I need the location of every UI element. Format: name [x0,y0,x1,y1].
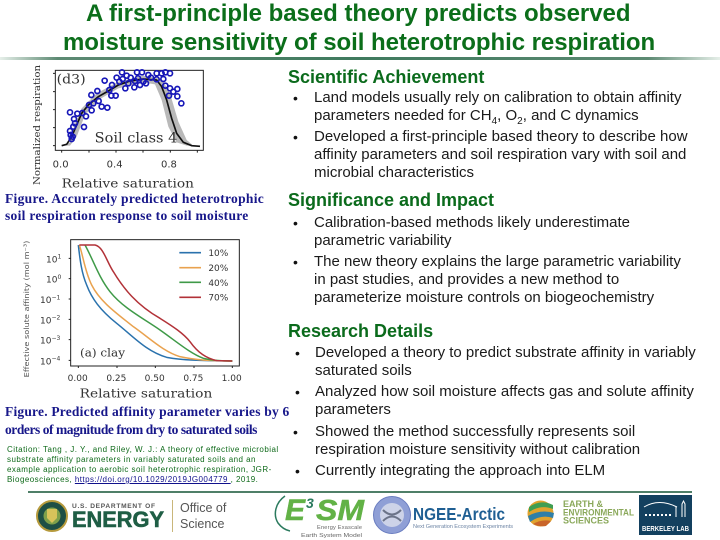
y tick labels: 1 [57,254,61,261]
panel: significance and impact: parameterize moisture controls on biogeochemistry [314,289,654,306]
panel: research details [288,321,696,479]
panel: significance and impact: in past studies, and provides a new method to [314,271,619,288]
y tick labels: 10 [40,357,51,367]
panel label clay: (a) clay [80,346,126,359]
panel: significance and impact: The new theory explains the large parametric variability [314,253,681,270]
heading: scientific achievement: Scientific Achievement [288,67,484,87]
logo: US Department of Energy, Office of Science: Science [180,517,225,531]
citation: substrate affinity parameters in variably saturated soils and an [7,455,256,464]
logo: US Department of Energy, Office of Science: U.S. DEPARTMENT OF [72,503,155,510]
curve 10% [78,245,232,361]
x tick labels: 0.00 [68,374,88,384]
panel: scientific achievement: • [293,129,298,145]
uncertainty band [62,76,193,146]
logo: E3SM: SM [316,495,365,527]
x tick labels: 1.00 [222,374,242,384]
title: A first-principle based theory predicts observed [86,0,630,27]
title [63,0,655,56]
panel: scientific achievement: • [293,90,298,106]
bullets [293,344,696,479]
model curve [62,79,200,146]
title: moisture sensitivity of soil heterotrophic respiration [63,29,655,56]
logo: US Department of Energy, Office of Science: ENERGY [72,507,164,532]
x axis title: Relative saturation [62,176,194,190]
x tick labels [53,159,177,170]
panel: research details: Analyzed how soil moisture affects gas and solute affinity [315,383,694,400]
y tick labels: −1 [51,294,60,301]
logo: E3SM: 3 [306,495,314,511]
x tick labels: 0.0 [53,159,69,170]
x tick labels: 0.8 [161,159,177,170]
panel: scientific achievement: affinity parameters and soil respiration vary with soil and [314,146,686,163]
panel: significance and impact: • [293,215,298,231]
logo: E3SM: Earth System Model [301,533,362,539]
logo: Earth and Environmental Sciences [528,499,634,526]
citation: example application to aerobic soil heterotrophic respiration, JGR- [7,465,272,474]
x tick labels: 0.25 [106,374,126,384]
logo: Berkeley Lab [639,495,692,535]
logo: E3SM [274,494,365,539]
panel: research details: Showed the method successfully represents soil [315,423,635,440]
y tick labels: 10 [40,337,51,347]
logo: NGEE-Arctic [373,496,513,534]
panel: significance and impact [288,190,681,306]
panel: scientific achievement: Land models usually rely on calibration to obtain affinity [314,89,681,106]
y tick labels: −4 [51,356,60,363]
caption: respiration figure: Figure. Accurately predicted heterotrophic [5,191,264,206]
citation: Biogeosciences, https://doi.org/10.1029/2019JG004779 , 2019. [7,475,258,484]
chart: effective solute affinity [22,239,242,401]
y tick labels: 10 [46,276,57,286]
logo: NGEE-Arctic: NGEE-Arctic [413,504,505,524]
bullets [293,89,688,181]
bullets [293,214,681,306]
y tick labels: −2 [51,315,60,322]
y tick labels [40,254,61,367]
y axis title: Effective solute affinity (mol m⁻³) [22,241,31,377]
chart: normalized respiration vs relative saturation [32,65,204,190]
heading: research details: Research Details [288,321,433,341]
caption: respiration figure: soil respiration response to soil moisture [5,208,249,223]
legend: 70% [208,294,229,304]
x tick labels [68,374,242,384]
logo: US Department of Energy, Office of Science [36,500,227,532]
logo: Earth and Environmental Sciences: EARTH & [563,499,603,509]
y tick labels: 0 [57,274,61,281]
legend [179,249,229,304]
panel: research details: Developed a theory to predict substrate affinity in variably [315,344,696,361]
citation: Citation: Tang , J. Y., and Riley, W. J.: A theory of effective microbial [7,445,279,454]
panel: scientific achievement: Developed a first-principle based theory to describe how [314,128,688,145]
panel: research details: • [295,463,300,479]
curve 70% [79,245,232,361]
panel: research details: Currently integrating the approach into ELM [315,462,605,479]
x tick labels: 0.75 [183,374,203,384]
x axis title: Relative saturation [80,387,212,401]
caption: affinity figure: Figure. Predicted affinity parameter varies by 6 [5,404,289,419]
legend: 20% [208,264,229,274]
curve 40% [85,245,232,361]
logo: E3SM: Energy Exascale [317,525,362,531]
caption: affinity figure [5,404,289,437]
axes frame [55,70,203,150]
panel label d3: (d3) [57,73,86,88]
panel: scientific achievement: microbial characteristics [314,164,474,181]
header rule [0,57,720,60]
panel: research details: saturated soils [315,362,412,379]
panel: significance and impact: parametric variability [314,232,452,249]
curve 20% [79,245,232,361]
footer rule [28,491,692,493]
panel: research details: • [295,384,300,400]
panel: research details: parameters [315,401,391,418]
y tick labels: −3 [51,335,60,342]
panel: scientific achievement [288,67,688,181]
panel: significance and impact: Calibration-based methods likely underestimate [314,214,630,231]
legend: 10% [208,249,229,259]
legend: 40% [208,279,229,289]
caption: affinity figure: orders of magnitude from dry to saturated soils [5,422,257,437]
logo: NGEE-Arctic: Next Generation Ecosystem Experiments [413,524,513,530]
observed points [68,70,184,142]
y tick labels: 10 [40,296,51,306]
panel: research details: • [295,345,300,361]
caption: respiration figure [5,191,264,223]
x tick labels: 0.50 [145,374,165,384]
panel: significance and impact: • [293,254,298,270]
citation [7,445,279,484]
logo: US Department of Energy, Office of Science: Office of [180,501,227,515]
heading: significance and impact: Significance and Impact [288,190,494,210]
panel: research details: respiration moisture sensitivity without calibration [315,441,640,458]
panel: research details: • [293,424,298,440]
x tick labels: 0.4 [107,159,123,170]
y tick labels: 10 [40,316,51,326]
y tick labels: 10 [46,255,57,265]
panel label soil class: Soil class 4 [95,130,177,146]
y axis title: Normalized respiration [32,65,43,185]
logo: Earth and Environmental Sciences: SCIENCES [563,516,609,526]
panel: scientific achievement: parameters needed for CH4, O2, and C dynamics [314,107,639,127]
logo: E3SM: E [285,494,306,527]
